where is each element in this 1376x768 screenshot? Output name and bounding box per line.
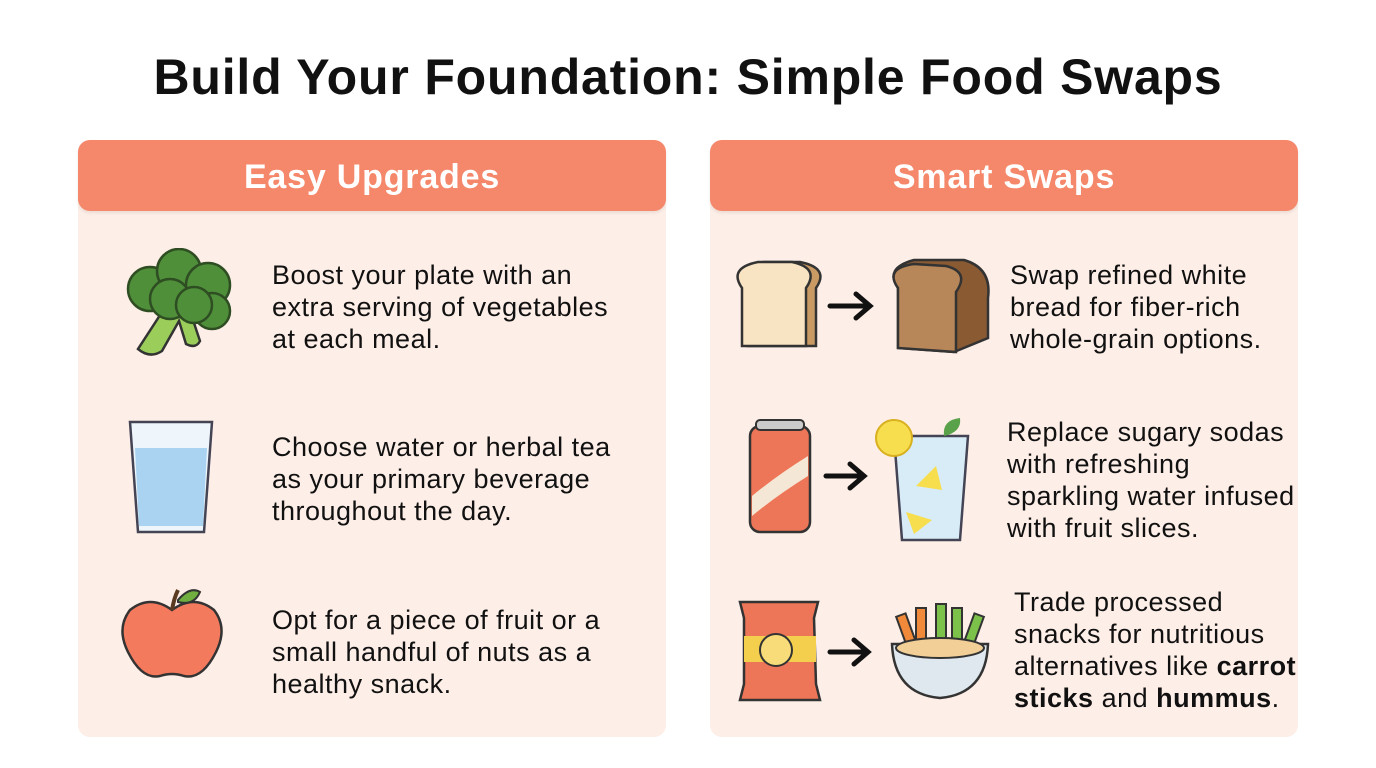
text: snacks: snacks for nutritious <box>1014 619 1265 649</box>
text: snack: small handful of nuts as a <box>272 637 591 667</box>
icon: broccoli <box>126 248 232 356</box>
heading: smart swaps: Smart Swaps <box>893 158 1115 196</box>
icon: white bread to whole grain <box>736 258 990 354</box>
text: snack: healthy snack. <box>272 669 452 699</box>
text: snacks: alternatives like carrot <box>1014 651 1296 681</box>
text: vegetables: Boost your plate with an <box>272 260 572 290</box>
heading: easy upgrades: Easy Upgrades <box>244 158 500 196</box>
icon: chips to carrots and hummus <box>738 600 990 702</box>
text: bread: Swap refined white <box>1010 260 1247 290</box>
text: snacks <box>1014 587 1296 713</box>
panel: easy upgrades <box>78 140 666 737</box>
text: water <box>272 432 611 526</box>
text: snacks: sticks and hummus. <box>1014 683 1280 713</box>
text: soda: Replace sugary sodas <box>1007 417 1284 447</box>
panel: smart swaps <box>710 140 1298 737</box>
icon: apple <box>121 589 223 678</box>
text: bread <box>1010 260 1262 354</box>
text: vegetables: extra serving of vegetables <box>272 292 608 322</box>
icon: water glass <box>128 420 214 534</box>
heading: easy upgrades <box>78 140 666 211</box>
text: vegetables <box>272 260 608 354</box>
text: soda: with refreshing <box>1007 449 1190 479</box>
title: Build Your Foundation: Simple Food Swaps <box>153 49 1222 105</box>
text: snack <box>272 605 600 699</box>
text: bread: bread for fiber-rich <box>1010 292 1241 322</box>
text: bread: whole-grain options. <box>1010 324 1262 354</box>
text: soda: with fruit slices. <box>1007 513 1199 543</box>
text: water: Choose water or herbal tea <box>272 432 611 462</box>
text: snack: Opt for a piece of fruit or a <box>272 605 600 635</box>
text: water: as your primary beverage <box>272 464 590 494</box>
text: snacks: Trade processed <box>1014 587 1223 617</box>
text: soda <box>1007 417 1295 543</box>
text: vegetables: at each meal. <box>272 324 441 354</box>
text: water: throughout the day. <box>272 496 512 526</box>
text: soda: sparkling water infused <box>1007 481 1295 511</box>
icon: soda to sparkling water <box>748 418 970 542</box>
heading: smart swaps <box>710 140 1298 211</box>
